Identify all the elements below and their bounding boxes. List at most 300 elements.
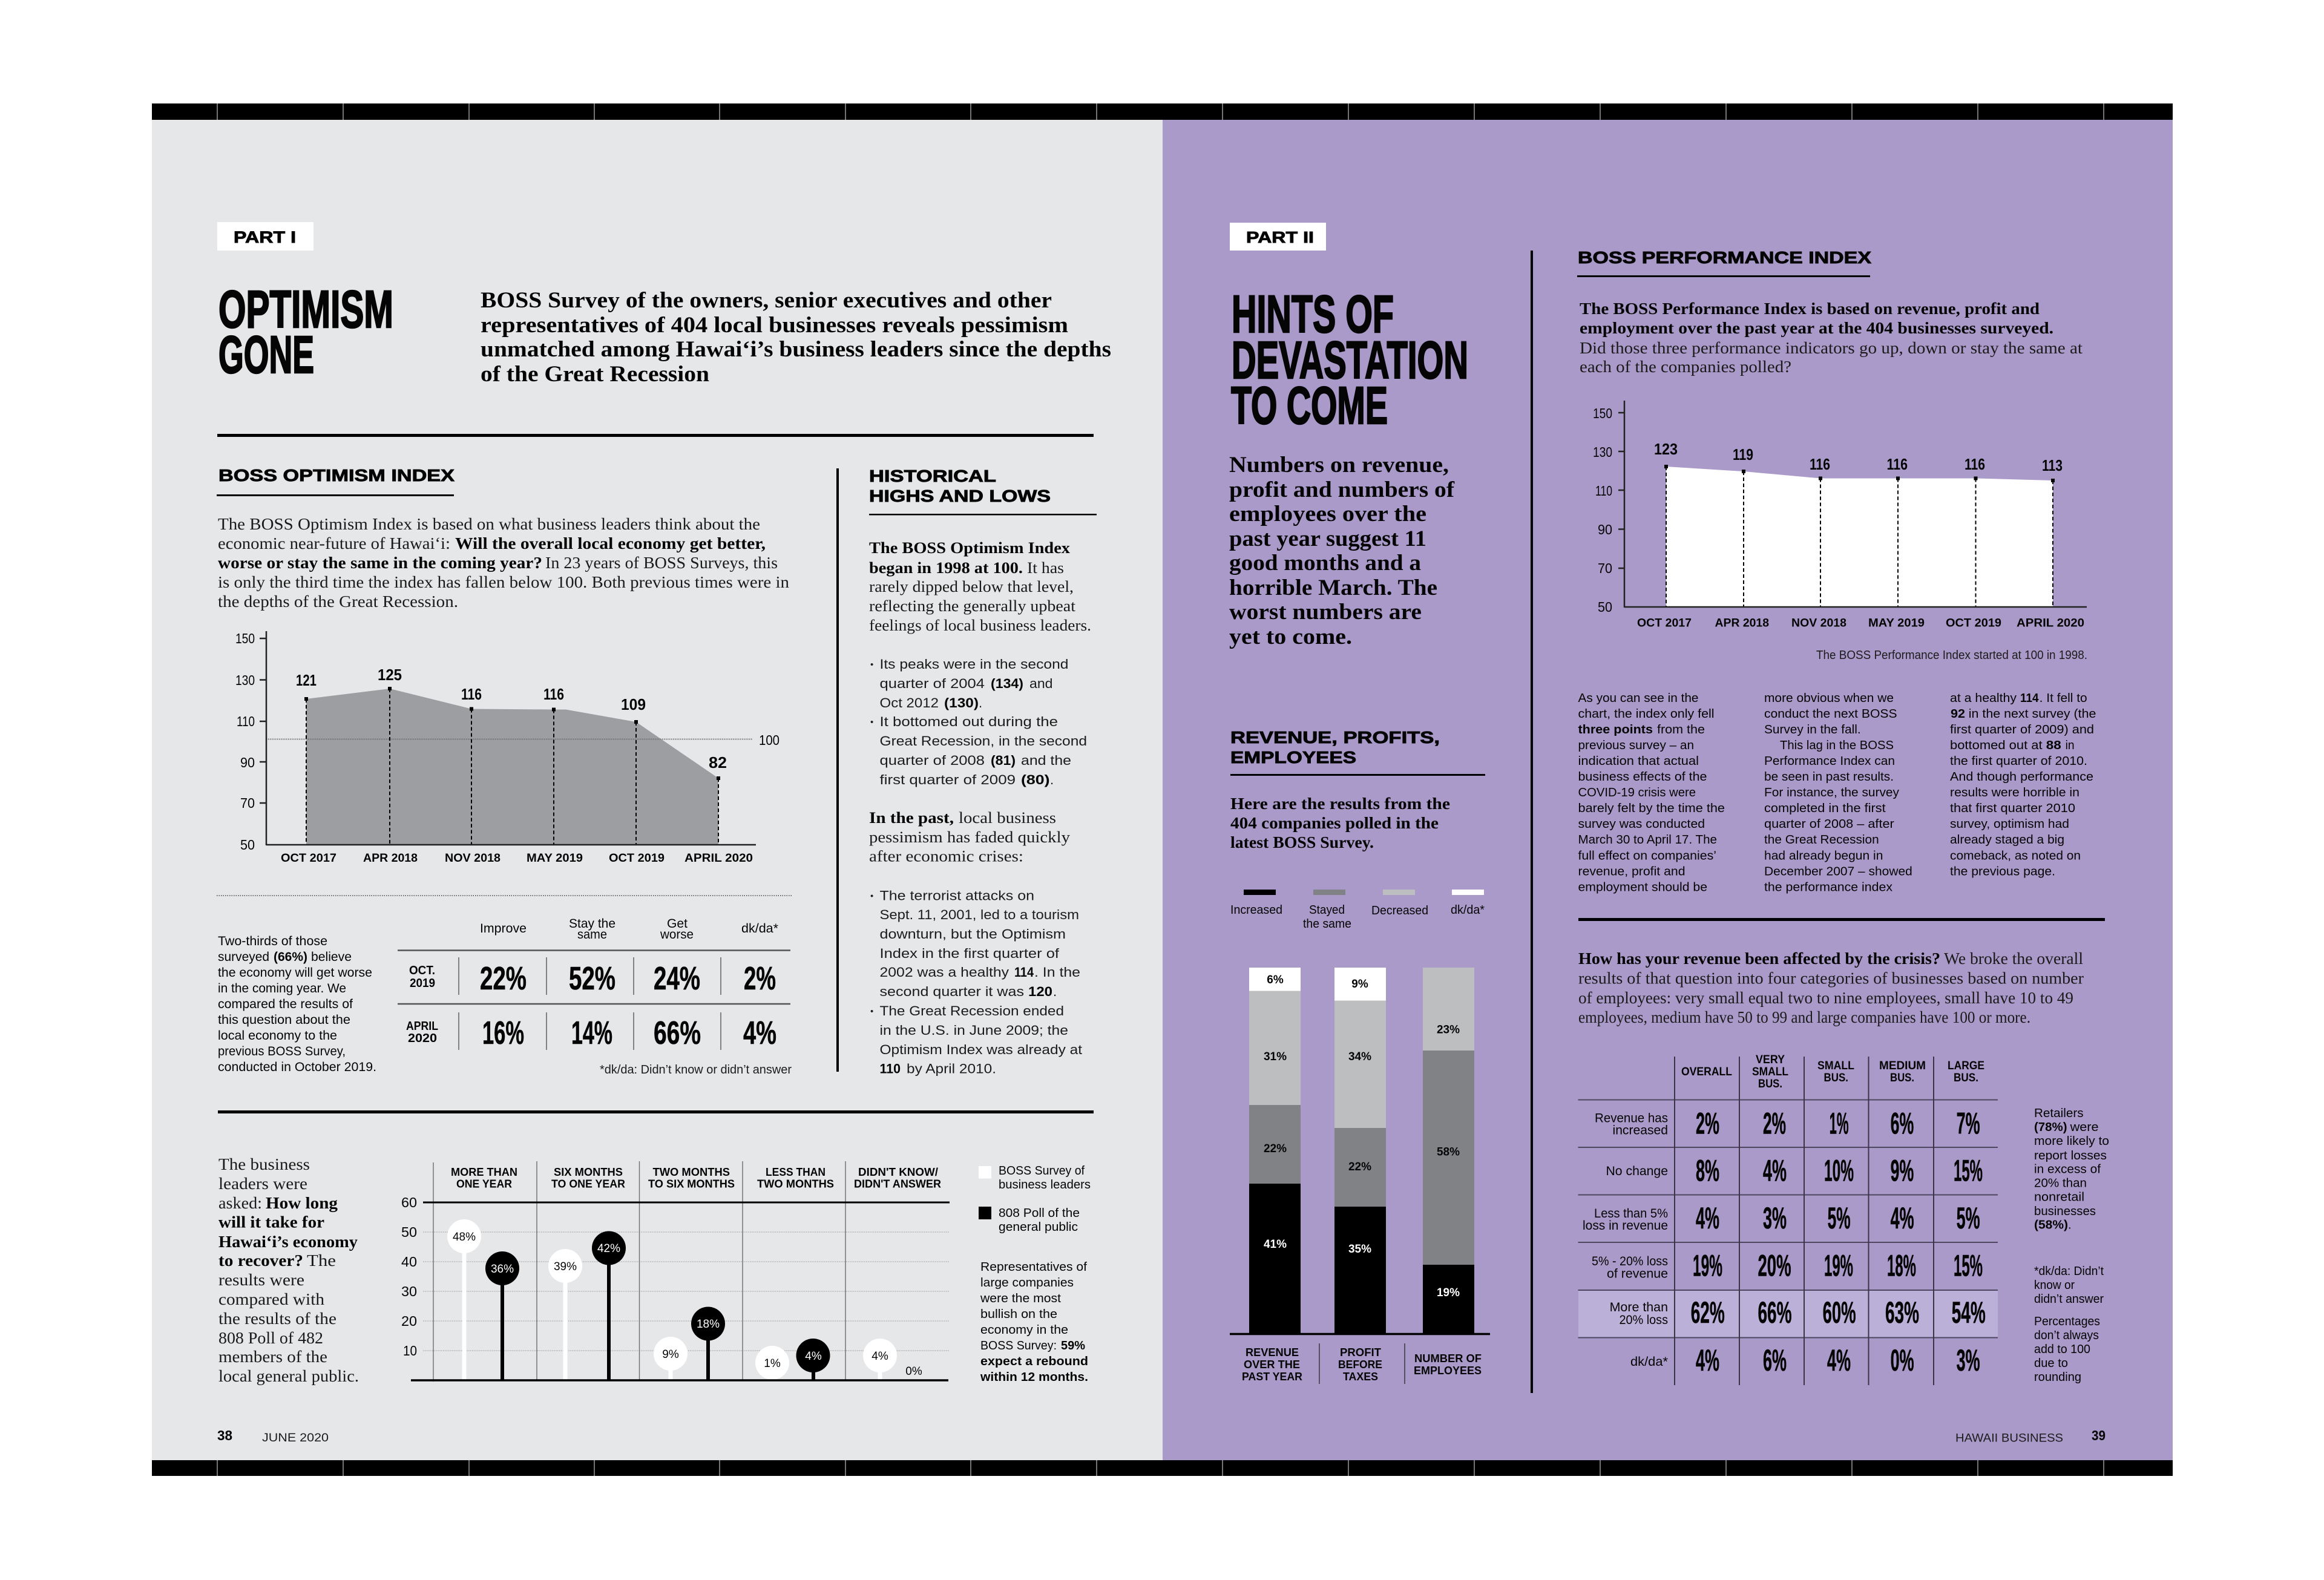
- chart: recovery lollipop chart: 1%: [764, 1357, 781, 1370]
- table: revenue impact by business size: [1578, 1054, 1998, 1385]
- table values: 3%: [1957, 1343, 1980, 1377]
- chart: stacked bars revenue, profit, employees: [1230, 968, 1490, 1384]
- list: peaks and bottoms: [870, 657, 1087, 787]
- intro text: Part I deck: BOSS Survey of the owners, senior executives and other: [481, 288, 1052, 313]
- row labels: 20% loss: [1620, 1313, 1668, 1327]
- column headers: BUS.: [1954, 1072, 1978, 1084]
- table values: 4%: [1696, 1201, 1719, 1235]
- legend: recovery chart: [979, 1164, 1091, 1234]
- chart: performance index area chart: 113: [2042, 456, 2063, 474]
- text block: two-thirds note: conducted in October 2019.: [218, 1060, 376, 1074]
- text block: two-thirds note: local economy to the: [218, 1029, 337, 1043]
- callout: large companies note: Representatives of: [980, 1260, 1087, 1274]
- chart: recovery lollipop chart: 40: [401, 1254, 417, 1270]
- text block: performance analysis column 1: barely felt by the time the: [1578, 802, 1725, 815]
- text block: performance index description: The BOSS Performance Index is based on revenue, profit and: [1580, 300, 2040, 318]
- bar: revenue: 41%: [1264, 1238, 1287, 1251]
- text block: performance analysis column 1: from the: [1657, 723, 1705, 736]
- chart: recovery lollipop chart: 18%: [697, 1318, 720, 1331]
- text block: performance analysis column 2: completed in the first: [1764, 802, 1886, 815]
- text block: performance analysis column 2: the Great Recession: [1764, 833, 1879, 847]
- legend: stacked bars: dk/da*: [1451, 903, 1485, 917]
- chart: optimism index area chart: 50: [240, 837, 255, 853]
- text block: index history intro: It has: [1027, 559, 1064, 577]
- row labels: [1583, 1111, 1668, 1369]
- chart: performance index area chart: 116: [1965, 455, 1985, 473]
- text block: performance analysis column 2: [1764, 692, 1912, 894]
- chart: recovery lollipop chart: DIDN'T ANSWER: [854, 1178, 941, 1190]
- chart: recovery lollipop chart: TWO MONTHS: [757, 1178, 834, 1190]
- legend: recovery chart: general public: [999, 1221, 1078, 1234]
- footer: right page: [1955, 1428, 2106, 1445]
- bar: profit: 9%: [1351, 978, 1368, 991]
- text block: optimism index description: the depths of the Great Recession.: [218, 592, 458, 611]
- callout: retailers note: nonretail: [2034, 1191, 2084, 1204]
- callout: large companies note: were the most: [980, 1292, 1061, 1305]
- chart: performance index area chart: APRIL 2020: [2017, 617, 2084, 629]
- table values: 2%: [1763, 1106, 1786, 1140]
- text block: two-thirds note: surveyed: [218, 950, 269, 964]
- bar: revenue: 6%: [1267, 974, 1284, 986]
- list: peaks and bottoms: quarter of 2008: [880, 753, 985, 768]
- table values: 7%: [1957, 1106, 1980, 1140]
- intro text: Part II deck: profit and numbers of: [1229, 477, 1455, 502]
- table values: 4%: [1891, 1201, 1914, 1235]
- list: past crises: The terrorist attacks on: [880, 888, 1034, 903]
- table: economy outlook comparison: OCT.: [409, 964, 435, 977]
- text block: how long to recover: local general public.: [218, 1367, 359, 1385]
- column headers: BUS.: [1758, 1078, 1782, 1090]
- table values: 3%: [1763, 1201, 1787, 1235]
- panel: right page background: [1163, 120, 2173, 1460]
- chart: optimism index area chart: 82: [709, 753, 727, 772]
- text block: performance analysis column 3: already staged a big: [1950, 833, 2064, 847]
- text block: two-thirds note: this question about the: [218, 1013, 350, 1027]
- text block: optimism index description: In 23 years of BOSS Surveys, this: [545, 554, 778, 572]
- list: peaks and bottoms: Its peaks were in the second: [880, 657, 1069, 672]
- list: peaks and bottoms: quarter of 2004: [880, 676, 985, 691]
- list: past crises: •: [870, 891, 873, 902]
- chart: recovery lollipop chart: 39%: [554, 1260, 577, 1273]
- text block: revenue crisis question: [1578, 949, 2084, 1026]
- footnote: dk/da and rounding: didn’t answer: [2034, 1293, 2104, 1306]
- chart: optimism index area chart: MAY 2019: [527, 852, 583, 865]
- callout: large companies note: 59%: [1061, 1339, 1085, 1352]
- text block: performance analysis column 2: conduct the next BOSS: [1764, 707, 1897, 721]
- chart: performance index area chart: 110: [1595, 483, 1612, 499]
- bar: profit: 22%: [1348, 1161, 1371, 1173]
- bar: employees: 19%: [1437, 1287, 1460, 1299]
- text block: revenue crisis question: employees, medium have 50 to 99 and large companies have 100 or more.: [1578, 1008, 2030, 1026]
- text block: results intro: [1230, 795, 1450, 851]
- table values: 60%: [1823, 1296, 1856, 1329]
- text block: performance analysis column 2: Performance Index can: [1764, 755, 1895, 768]
- list: past crises: 114: [1014, 965, 1034, 980]
- table: economy outlook comparison: 22%: [480, 960, 527, 997]
- panel: historical highs and lows: [836, 467, 1097, 1076]
- table values: 6%: [1891, 1106, 1914, 1140]
- list: past crises: second quarter it was: [880, 984, 1024, 999]
- text block: past pessimism: In the past,: [869, 809, 954, 827]
- text block: performance analysis column 2: December 2007 – showed: [1764, 865, 1912, 879]
- table: economy outlook comparison: APRIL: [406, 1020, 438, 1033]
- callout: retailers note: report losses: [2034, 1149, 2107, 1162]
- row labels: Revenue has: [1595, 1111, 1668, 1126]
- chart: optimism index area chart: OCT 2017: [281, 852, 336, 865]
- text block: how long to recover: The: [307, 1251, 336, 1270]
- text block: performance analysis column 3: survey, optimism had: [1950, 818, 2069, 831]
- legend: stacked bars: [1230, 890, 1485, 931]
- text block: how long to recover: compared with: [218, 1290, 325, 1308]
- footnote: dk/da and rounding: rounding: [2034, 1371, 2081, 1384]
- chart: performance index area chart: APR 2018: [1715, 617, 1769, 629]
- chart: optimism index area chart: 110: [237, 713, 255, 729]
- chart: recovery lollipop chart: DIDN'T KNOW/: [858, 1166, 938, 1178]
- chart: performance index area chart: NOV 2018: [1791, 617, 1846, 629]
- text block: performance analysis column 1: COVID-19 crisis were: [1578, 786, 1696, 799]
- list: past crises: in the U.S. in June 2009; the: [880, 1023, 1068, 1038]
- intro text: Part II deck: past year suggest 11: [1229, 526, 1426, 551]
- callout: retailers note: were: [2070, 1121, 2099, 1134]
- intro text: Part II deck: yet to come.: [1229, 624, 1352, 649]
- text block: performance analysis column 2: For instance, the survey: [1764, 786, 1899, 799]
- bar: employees: 23%: [1437, 1024, 1460, 1036]
- legend: stacked bars: Decreased: [1371, 904, 1428, 917]
- text block: two-thirds note: (66%): [274, 950, 307, 964]
- heading: revenue, profits, employees: [1230, 728, 1485, 776]
- chart: performance index area chart: [1593, 401, 2087, 629]
- chart: optimism index area chart: APR 2018: [363, 852, 418, 865]
- text block: optimism index description: The BOSS Optimism Index is based on what business leaders think about the: [218, 515, 760, 533]
- table values: 0%: [1891, 1343, 1914, 1377]
- table values: 19%: [1824, 1249, 1853, 1283]
- footer: right page: 39: [2092, 1428, 2106, 1443]
- text block: optimism index description: economic near-future of Hawai‘i:: [218, 534, 450, 552]
- text block: two-thirds note: the economy will get worse: [218, 966, 372, 980]
- footer: left page: 38: [217, 1428, 232, 1443]
- table values: 2%: [1696, 1106, 1719, 1140]
- list: peaks and bottoms: and the: [1021, 753, 1071, 768]
- text block: results intro: Here are the results from the: [1230, 795, 1450, 813]
- text block: performance analysis column 3: comeback, as noted on: [1950, 850, 2081, 863]
- table values: 15%: [1954, 1153, 1983, 1187]
- table: economy outlook comparison: Improve: [480, 922, 527, 936]
- table: economy outlook comparison: 2%: [744, 960, 776, 997]
- table: economy outlook comparison: *dk/da: Didn’t know or didn’t answer: [600, 1063, 792, 1077]
- chart: optimism index area chart: [235, 631, 780, 865]
- footnote: dk/da and rounding: Percentages: [2034, 1315, 2100, 1328]
- list: peaks and bottoms: Great Recession, in the second: [880, 733, 1087, 749]
- intro text: Part I deck: of the Great Recession: [481, 362, 709, 387]
- text block: performance analysis column 3: bottomed out at: [1950, 739, 2043, 752]
- list: past crises: 110: [880, 1061, 901, 1076]
- heading: revenue, profits, employees: REVENUE, PROFITS,: [1230, 728, 1440, 747]
- column headers: BUS.: [1824, 1072, 1848, 1084]
- footer: right page: HAWAII BUSINESS: [1955, 1432, 2063, 1445]
- chart: recovery lollipop chart: 60: [401, 1195, 417, 1210]
- table: economy outlook comparison: dk/da*: [741, 922, 778, 936]
- text block: how long to recover: The business: [218, 1155, 310, 1173]
- text block: performance analysis column 2: more obvious when we: [1764, 692, 1894, 705]
- table values: 4%: [1827, 1343, 1851, 1377]
- list: peaks and bottoms: (130): [944, 695, 979, 710]
- table: economy outlook comparison: same: [577, 928, 607, 942]
- text block: how long to recover: to recover?: [218, 1251, 303, 1270]
- heading: BOSS Optimism Index: BOSS OPTIMISM INDEX: [218, 466, 455, 485]
- list: past crises: Index in the first quarter of: [880, 946, 1060, 961]
- text block: performance analysis column 1: employment should be: [1578, 881, 1707, 894]
- text block: performance index description: employment over the past year at the 404 businesses surveyed.: [1580, 319, 2053, 337]
- callout: large companies note: expect a rebound: [980, 1355, 1088, 1368]
- footnote: dk/da and rounding: *dk/da: Didn’t: [2034, 1265, 2104, 1278]
- callout: large companies note: bullish on the: [980, 1308, 1057, 1321]
- intro text: Part II deck: horrible March. The: [1229, 575, 1437, 600]
- chart: stacked bars revenue, profit, employees: EMPLOYEES: [1414, 1365, 1482, 1377]
- text block: revenue crisis question: of employees: very small equal two to nine employees, small have 10 to 49: [1578, 989, 2073, 1007]
- bar: revenue: [1249, 968, 1301, 1334]
- text block: revenue crisis question: We broke the overall: [1944, 949, 2083, 968]
- callout: retailers note: [2034, 1107, 2109, 1232]
- chart: stacked bars revenue, profit, employees: OVER THE: [1244, 1359, 1300, 1371]
- text block: performance analysis column 3: 114: [2020, 692, 2039, 705]
- chart: performance index area chart: 50: [1598, 599, 1612, 615]
- callout: large companies note: economy in the: [980, 1323, 1068, 1337]
- callout: retailers note: Retailers: [2034, 1107, 2084, 1120]
- bar: employees: 58%: [1437, 1146, 1460, 1158]
- chart: recovery lollipop chart: LESS THAN: [766, 1166, 826, 1178]
- legend: stacked bars: Stayed: [1309, 903, 1345, 917]
- chart: recovery lollipop chart: 30: [401, 1283, 417, 1299]
- text block: performance analysis column 3: at a healthy: [1950, 692, 2017, 705]
- footnote: dk/da and rounding: due to: [2034, 1357, 2068, 1370]
- table values: 54%: [1952, 1296, 1986, 1329]
- list: peaks and bottoms: Oct 2012: [880, 695, 939, 710]
- chart: optimism index area chart: 116: [461, 685, 482, 703]
- list: peaks and bottoms: (81): [991, 753, 1016, 768]
- chart: recovery lollipop chart: MORE THAN: [451, 1166, 517, 1178]
- table values: 10%: [1824, 1153, 1854, 1187]
- text block: performance analysis column 3: [1950, 692, 2096, 879]
- title: Optimism Gone: GONE: [218, 326, 314, 384]
- list: peaks and bottoms: first quarter of 2009: [880, 772, 1016, 787]
- chart: optimism index area chart: 100: [759, 732, 780, 748]
- table values: 9%: [1891, 1153, 1914, 1187]
- text block: performance analysis column 3: 88: [2046, 739, 2061, 752]
- chart: stacked bars revenue, profit, employees: NUMBER OF: [1414, 1352, 1482, 1365]
- text block: how long to recover: asked:: [218, 1194, 262, 1212]
- chart: performance index area chart: 130: [1593, 444, 1612, 460]
- text block: how long to recover: leaders were: [218, 1175, 307, 1193]
- row labels: Less than 5%: [1594, 1207, 1668, 1221]
- table: economy outlook comparison: 16%: [482, 1015, 524, 1051]
- list: peaks and bottoms: (80): [1021, 772, 1049, 787]
- list: past crises: 2002 was a healthy: [880, 965, 1009, 980]
- column headers: SMALL: [1752, 1066, 1788, 1078]
- text block: index history intro: rarely dipped below that level,: [869, 578, 1074, 595]
- chart: recovery lollipop chart: 20: [401, 1313, 417, 1329]
- list: past crises: . In the: [1034, 965, 1080, 980]
- tag: Part II: [1230, 223, 1326, 251]
- text block: performance analysis column 3: 92: [1951, 707, 1965, 721]
- list: peaks and bottoms: •: [870, 717, 873, 727]
- row labels: increased: [1612, 1123, 1668, 1138]
- intro text: Part I deck: [481, 288, 1111, 387]
- column headers: OVERALL: [1681, 1066, 1732, 1078]
- table values: [1691, 1106, 1986, 1377]
- text block: performance analysis column 3: that first quarter 2010: [1950, 802, 2075, 815]
- row labels: More than: [1610, 1300, 1668, 1314]
- text block: how long to recover: will it take for: [218, 1213, 324, 1231]
- chart: recovery lollipop chart: 9%: [662, 1348, 679, 1361]
- legend: recovery chart: 808 Poll of the: [999, 1207, 1080, 1220]
- chart: optimism index area chart: OCT 2019: [609, 852, 665, 865]
- table: economy outlook comparison: worse: [660, 928, 694, 942]
- footnote: dk/da and rounding: know or: [2034, 1279, 2075, 1292]
- chart: optimism index area chart: 70: [240, 795, 255, 811]
- text block: optimism index description: worse or stay the same in the coming year?: [218, 554, 542, 572]
- table values: 6%: [1763, 1343, 1787, 1377]
- text block: how long to recover: How long: [266, 1194, 338, 1212]
- column headers: SMALL: [1817, 1060, 1854, 1072]
- chart: recovery lollipop chart: 42%: [597, 1242, 620, 1255]
- table values: 5%: [1957, 1201, 1980, 1235]
- chart: recovery lollipop chart: TO SIX MONTHS: [648, 1178, 735, 1190]
- chart: performance index area chart: 119: [1733, 445, 1753, 464]
- row labels: 5% - 20% loss: [1592, 1254, 1668, 1268]
- text block: past pessimism: pessimism has faded quickly: [869, 828, 1070, 846]
- list: peaks and bottoms: .: [1050, 772, 1054, 787]
- text block: performance analysis column 1: indication that actual: [1578, 755, 1699, 768]
- chart: recovery lollipop chart: SIX MONTHS: [554, 1166, 623, 1178]
- text block: performance index description: each of the companies polled?: [1580, 358, 1791, 376]
- text block: performance analysis column 3: the previous page.: [1950, 865, 2055, 879]
- chart: recovery lollipop chart: TO ONE YEAR: [551, 1178, 625, 1190]
- text block: performance index description: [1580, 300, 2083, 376]
- intro text: Part II deck: Numbers on revenue,: [1229, 453, 1449, 477]
- tag: Part I: [217, 222, 313, 251]
- tag: Part I: PART I: [234, 228, 296, 246]
- text block: performance analysis column 1: As you can see in the: [1578, 692, 1698, 705]
- intro text: Part I deck: representatives of 404 local businesses reveals pessimism: [481, 313, 1068, 338]
- text block: past pessimism: after economic crises:: [869, 847, 1023, 865]
- footer: left page: JUNE 2020: [262, 1432, 329, 1444]
- chart: optimism index area chart: 130: [235, 672, 255, 688]
- row labels: loss in revenue: [1583, 1219, 1668, 1233]
- chart: recovery lollipop chart: 36%: [491, 1263, 514, 1276]
- list: past crises: .: [1053, 984, 1057, 999]
- chart: recovery lollipop chart: 10: [403, 1343, 417, 1359]
- footnote: dk/da and rounding: add to 100: [2034, 1343, 2090, 1356]
- list: past crises: downturn, but the Optimism: [880, 926, 1066, 942]
- text block: how long to recover: [218, 1155, 359, 1385]
- intro text: Part II deck: employees over the: [1229, 502, 1426, 526]
- title: Hints of Devastation to Come: [1231, 285, 1468, 435]
- text block: two-thirds note: Two-thirds of those: [218, 934, 327, 948]
- callout: retailers note: more likely to: [2034, 1135, 2109, 1148]
- chart: recovery lollipop chart: 0%: [905, 1365, 922, 1378]
- heading: BOSS Performance Index: [1577, 248, 1871, 277]
- text block: performance analysis column 1: full effect on companies’: [1578, 850, 1716, 863]
- column headers: [1681, 1054, 1984, 1090]
- text block: performance analysis column 2: the performance index: [1764, 881, 1892, 894]
- list: past crises: Sept. 11, 2001, led to a tourism: [880, 907, 1079, 922]
- text block: performance analysis column 1: chart, the index only fell: [1578, 707, 1714, 721]
- bar: profit: [1334, 968, 1386, 1334]
- heading: historical highs and lows: HIGHS AND LOWS: [869, 487, 1051, 505]
- intro text: Part II deck: worst numbers are: [1229, 600, 1422, 624]
- footer: left page: [217, 1428, 329, 1444]
- text block: performance analysis column 3: And though performance: [1950, 770, 2093, 784]
- table values: 5%: [1828, 1201, 1851, 1235]
- bar: revenue: 31%: [1264, 1051, 1287, 1063]
- text block: index history intro: feelings of local business leaders.: [869, 617, 1091, 634]
- table values: 19%: [1693, 1249, 1722, 1283]
- chart: performance index area chart: 150: [1593, 405, 1612, 421]
- chart: optimism index area chart: 125: [378, 666, 402, 684]
- text block: performance analysis column 3: the first quarter of 2010.: [1950, 755, 2087, 768]
- text block: how long to recover: results were: [218, 1271, 304, 1289]
- note: performance index start: The BOSS Performance Index started at 100 in 1998.: [1816, 649, 2087, 662]
- text block: performance analysis column 3: . It fell to: [2040, 692, 2087, 705]
- text block: how long to recover: 808 Poll of 482: [218, 1329, 323, 1347]
- chart: performance index area chart: 90: [1598, 522, 1612, 537]
- heading: BOSS Optimism Index: [217, 466, 455, 496]
- text block: revenue crisis question: How has your revenue been affected by the crisis?: [1578, 949, 1940, 968]
- text block: performance index description: Did those three performance indicators go up, down or stay the same at: [1580, 339, 2083, 357]
- table: economy outlook comparison: 52%: [569, 960, 615, 997]
- chart: stacked bars revenue, profit, employees: BEFORE: [1338, 1359, 1382, 1371]
- heading: historical highs and lows: HISTORICAL: [869, 467, 996, 485]
- text block: results intro: 404 companies polled in the: [1230, 814, 1439, 832]
- intro text: Part I deck: unmatched among Hawai‘i’s business leaders since the depths: [481, 337, 1111, 362]
- text block: optimism index description: is only the third time the index has fallen below 100. Both previous times were in: [218, 573, 790, 591]
- chart: optimism index area chart: 150: [235, 631, 255, 646]
- list: peaks and bottoms: and: [1029, 676, 1053, 691]
- column headers: LARGE: [1948, 1060, 1984, 1072]
- text block: two-thirds note: previous BOSS Survey,: [218, 1044, 346, 1058]
- chart: stacked bars revenue, profit, employees: PAST YEAR: [1242, 1371, 1302, 1383]
- table values: 4%: [1696, 1343, 1719, 1377]
- list: peaks and bottoms: •: [870, 660, 873, 670]
- text block: performance analysis column 1: business effects of the: [1578, 770, 1707, 784]
- table values: 18%: [1887, 1249, 1916, 1283]
- chart: recovery lollipop chart: 4%: [872, 1350, 888, 1363]
- chart: performance index area chart: 70: [1598, 560, 1612, 576]
- table values: 66%: [1758, 1296, 1791, 1329]
- chart: recovery lollipop chart: 4%: [805, 1350, 822, 1363]
- table: economy outlook comparison: [398, 917, 792, 1077]
- heading: historical highs and lows: [869, 467, 1097, 516]
- text block: performance analysis column 2: Survey in the fall.: [1764, 723, 1861, 736]
- chart: stacked bars revenue, profit, employees: TAXES: [1343, 1371, 1378, 1383]
- footnote: dk/da and rounding: don’t always: [2034, 1329, 2099, 1342]
- bar: employees: [1423, 968, 1474, 1334]
- chart: optimism index area chart: NOV 2018: [445, 852, 501, 865]
- callout: large companies note: [980, 1260, 1088, 1384]
- list: past crises: [870, 888, 1082, 1076]
- list: peaks and bottoms: (134): [991, 676, 1023, 691]
- text block: index history intro: reflecting the generally upbeat: [869, 597, 1076, 615]
- chart: optimism index area chart: 121: [296, 671, 317, 689]
- chart: stacked bars revenue, profit, employees: PROFIT: [1340, 1346, 1381, 1359]
- heading: BOSS Performance Index: BOSS PERFORMANCE INDEX: [1578, 248, 1871, 267]
- text block: two-thirds note: in the coming year. We: [218, 982, 346, 995]
- text block: performance analysis column 1: previous survey – an: [1578, 739, 1694, 752]
- chart: optimism index area chart: 109: [621, 695, 646, 713]
- table values: 62%: [1691, 1296, 1725, 1329]
- text block: performance analysis column 3: in: [2066, 739, 2075, 752]
- text block: performance analysis column 3: results were horrible in: [1950, 786, 2079, 799]
